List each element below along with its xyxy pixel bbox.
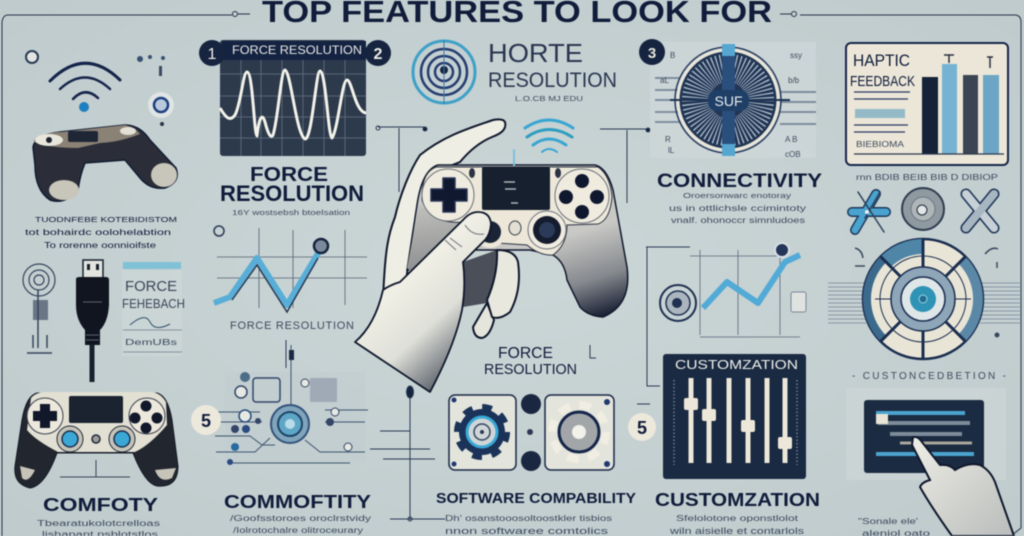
heading: commoftity: COMMOFTITY [224,492,371,512]
chip label: SUF [714,93,742,109]
heading: connectivity: us in ottlichsle ccimintoty [669,204,806,213]
heading: comfort [37,495,160,536]
small knobs [521,394,541,471]
tiny chip labels [660,51,802,159]
panel: force feedback usb [23,260,185,382]
heading: comfort: Tbearatukolotcrelloas [37,519,160,528]
text block: force feedback: FORCE [125,278,177,295]
heading: connectivity [657,171,822,225]
tiny chip labels: aL [660,76,669,85]
text block: force feedback: FEHEBACH [122,296,185,311]
controller right grip and body [407,165,628,317]
wave line [220,70,366,139]
tiny chip labels: cOB [785,150,801,159]
panel: connectivity chip [639,39,816,159]
heading: commoftity: /Goofsstoroes oroclrstvidy [230,514,371,523]
middle finger [487,250,519,318]
header band [222,41,366,60]
logo: horte resolution: L.O.CB MJ EDU [515,96,583,103]
heading: connectivity: CONNECTIVITY [657,171,822,192]
panel: haptic feedback: BIEBIOMA [856,140,905,149]
text block: touch caption [858,517,931,536]
text block: force feedback [122,262,185,356]
tiny chip labels: B [670,51,675,60]
diagram: circuit [214,345,368,465]
badge 5 left [191,405,221,435]
panel: force resolution waveform: FORCE RESOLUTION [232,43,362,57]
heading: customization: CUSTOMZATION [655,490,820,510]
tiny chip labels: b/b [788,76,800,85]
heading: software compatibility: nnon softwaree comtolics [445,526,609,536]
icon: antenna [23,264,55,353]
panel: wireless controller [25,51,177,250]
panel: force resolution waveform [220,40,366,156]
text block: tot bohairdc oolohelabtion [25,228,171,237]
icon: blue wireless arcs [514,120,573,165]
label: force resolution center: RESOLUTION [484,361,577,378]
heading: software compatibility: SOFTWARE COMPABILITY [436,490,636,507]
face buttons [559,174,604,219]
icon: blue star [852,192,886,232]
icon: controller top view [33,125,177,201]
icon: controller bottom left [15,392,178,488]
icon: usb plug [76,260,109,382]
panel: customization sliders [663,354,806,479]
heading: customization: wiln aisielle et contarlols [669,526,805,536]
badge 2 [365,40,391,66]
badge 5 right: 5 [637,418,647,438]
shaded hollow of the hand [463,250,497,307]
logo: horte resolution: RESOLUTION [488,69,617,92]
label: force resolution center [484,345,577,378]
heading: force resolution [220,164,364,217]
controller face plate [422,167,612,255]
label: customization divider: - CUSTONCEDBETION - [852,371,1006,382]
icon: wifi signal [50,63,120,112]
left grip [407,205,470,272]
controller screen [482,167,550,210]
badge 1 [199,40,225,66]
badge 5 right [628,413,656,441]
text block: To rorenne oonnioifste [44,241,157,250]
heading: software compatibility: Dh' osanstooosoltoostkler tisbios [445,514,612,523]
icon: pointing hand [912,437,1014,536]
heading: force resolution: FORCE [250,164,328,186]
text block: touch caption: "Sonale ele' [858,517,919,526]
heading: customization [655,490,820,536]
d-pad [431,178,467,212]
panel: haptic feedback [846,43,1008,165]
palm and thumb [355,212,491,392]
line chart: force resolution: FORCE RESOLUTION [230,320,354,332]
sticks [528,211,566,249]
badge 1: 1 [208,46,217,63]
icon: gauge [902,188,944,230]
bar chart [854,55,1004,154]
text block: TUODNFEBE KOTEBIDISTOM [35,217,177,224]
illustration: hand holding controller [355,119,628,392]
heading: commoftity [224,492,371,535]
heading: connectivity: vnalf. ohonoccr simnludoes [671,216,805,225]
line chart: customization [660,243,806,337]
tiny chip labels: lL [668,146,675,155]
logo: horte resolution: HORTE [488,38,583,68]
heading: commoftity: /Iolrotochalre olitroceurary [233,526,363,535]
icon: cream gear [552,405,606,459]
icon: small badges [26,51,174,126]
text block: force feedback: DemUBs [125,338,177,347]
label: force resolution center: FORCE [498,345,553,362]
connector lines [286,126,690,521]
panel: haptic feedback: HAPTIC [853,51,910,70]
logo: horte resolution [413,38,617,104]
heading: force resolution: RESOLUTION [220,181,364,206]
line chart: force resolution [214,226,367,332]
tiny chip labels: A B [785,135,797,144]
text block [25,217,177,250]
heading: force resolution: 16Y wostsebsh btoelsation [232,210,350,217]
badge 5 left: 5 [201,411,211,431]
heading: comfort: COMFOTY [43,495,158,515]
hand back and index finger [383,119,505,300]
chart: radial wheel [828,239,1020,359]
heading: customization: Sfelolotone oponstlolot [676,514,799,523]
icon: blue gear [458,408,506,456]
panel: haptic feedback: FEEDBACK [850,73,915,90]
panel: software gears [449,394,614,471]
small finger [473,303,494,338]
badge [639,39,665,65]
heading: software compatibility [436,490,636,536]
tiny chip labels: ssy [790,51,802,60]
panel: touch screen [846,388,1006,480]
tiny chip labels: R [665,135,671,144]
icon: x mark [966,194,994,228]
panel: connectivity chip: 3 [648,45,656,62]
caption: haptic: rnn BDIB BEIB BIB D DIBIOP [856,173,998,182]
heading: connectivity: Oroersonwarc enotoray [683,193,792,200]
badge 2: 2 [374,46,383,63]
panel: customization sliders: CUSTOMZATION [675,357,798,372]
